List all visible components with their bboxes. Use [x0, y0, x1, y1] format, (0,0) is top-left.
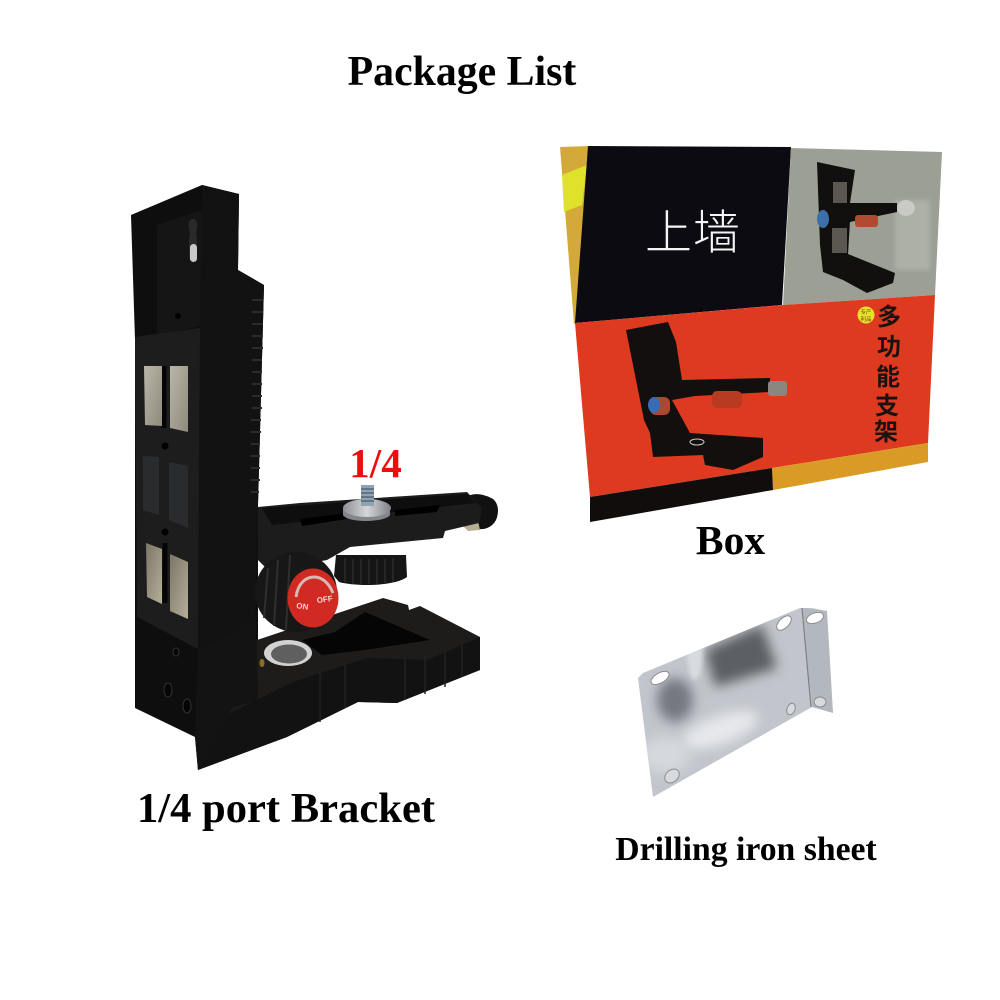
plate screw holes — [162, 442, 168, 450]
yellow seal: 利品 — [860, 315, 872, 323]
sheet base — [638, 608, 833, 797]
foot front face — [195, 637, 480, 770]
caption: drilling iron sheet: Drilling iron sheet — [615, 831, 877, 868]
lower thumb wheel — [334, 555, 407, 585]
red locking knob: OFF — [316, 594, 333, 605]
base foot — [195, 598, 480, 770]
red label: 1/4: 1/4 — [349, 440, 402, 486]
arm top surface — [262, 494, 476, 525]
lower screw holes — [164, 648, 191, 713]
grey photo panel — [783, 148, 942, 305]
foot ribs — [320, 643, 462, 722]
threaded socket — [264, 640, 312, 666]
vertical characters — [874, 297, 901, 447]
magnet plate — [135, 328, 200, 649]
vertical characters: 多 — [877, 297, 901, 332]
product photo: retail box — [560, 146, 942, 522]
vertical characters: 能 — [876, 357, 900, 392]
red locking knob: ON — [296, 601, 309, 612]
magnets — [144, 366, 188, 619]
yellow seal: 专产 — [860, 308, 872, 316]
product photo: 1/4 port bracket — [131, 185, 498, 770]
product photo: drilling iron sheet — [638, 608, 833, 797]
channel inner shading — [157, 210, 202, 337]
vertical characters: 支 — [875, 386, 899, 421]
foot cavity — [302, 612, 430, 655]
support arm — [258, 492, 498, 572]
red locking knob — [255, 552, 338, 632]
yellow seal — [858, 306, 874, 324]
ribbed side face — [198, 185, 264, 770]
black panel — [575, 146, 791, 323]
vertical characters: 架 — [874, 412, 898, 447]
mini bracket on red panel — [626, 322, 787, 470]
rib marks — [251, 300, 263, 492]
arm slot — [300, 513, 347, 526]
quarter-inch screw and washer — [343, 485, 391, 521]
bottom right flame strip — [772, 443, 928, 490]
sheet mounting holes — [649, 610, 826, 786]
title: Package List — [348, 49, 576, 95]
upper screw hole — [175, 313, 181, 319]
wall front edge over foot — [195, 620, 258, 770]
orange-red panel — [575, 295, 935, 497]
mini bracket in wall photo — [817, 162, 915, 293]
caption: bracket: 1/4 port Bracket — [137, 785, 435, 832]
vertical characters: 功 — [877, 327, 901, 362]
bottom black strip — [590, 468, 773, 522]
keyhole — [189, 219, 197, 261]
caption: box: Box — [696, 517, 765, 563]
plate centre slots — [164, 366, 165, 603]
end roller — [468, 494, 498, 529]
bracket wall back silhouette — [131, 185, 264, 770]
characters: shang qiang: 上墙 — [645, 194, 740, 263]
left yellow strip — [560, 146, 590, 324]
covered magnet pads — [143, 456, 188, 528]
metallic mottling — [640, 608, 833, 773]
sheet fold line — [802, 608, 811, 707]
